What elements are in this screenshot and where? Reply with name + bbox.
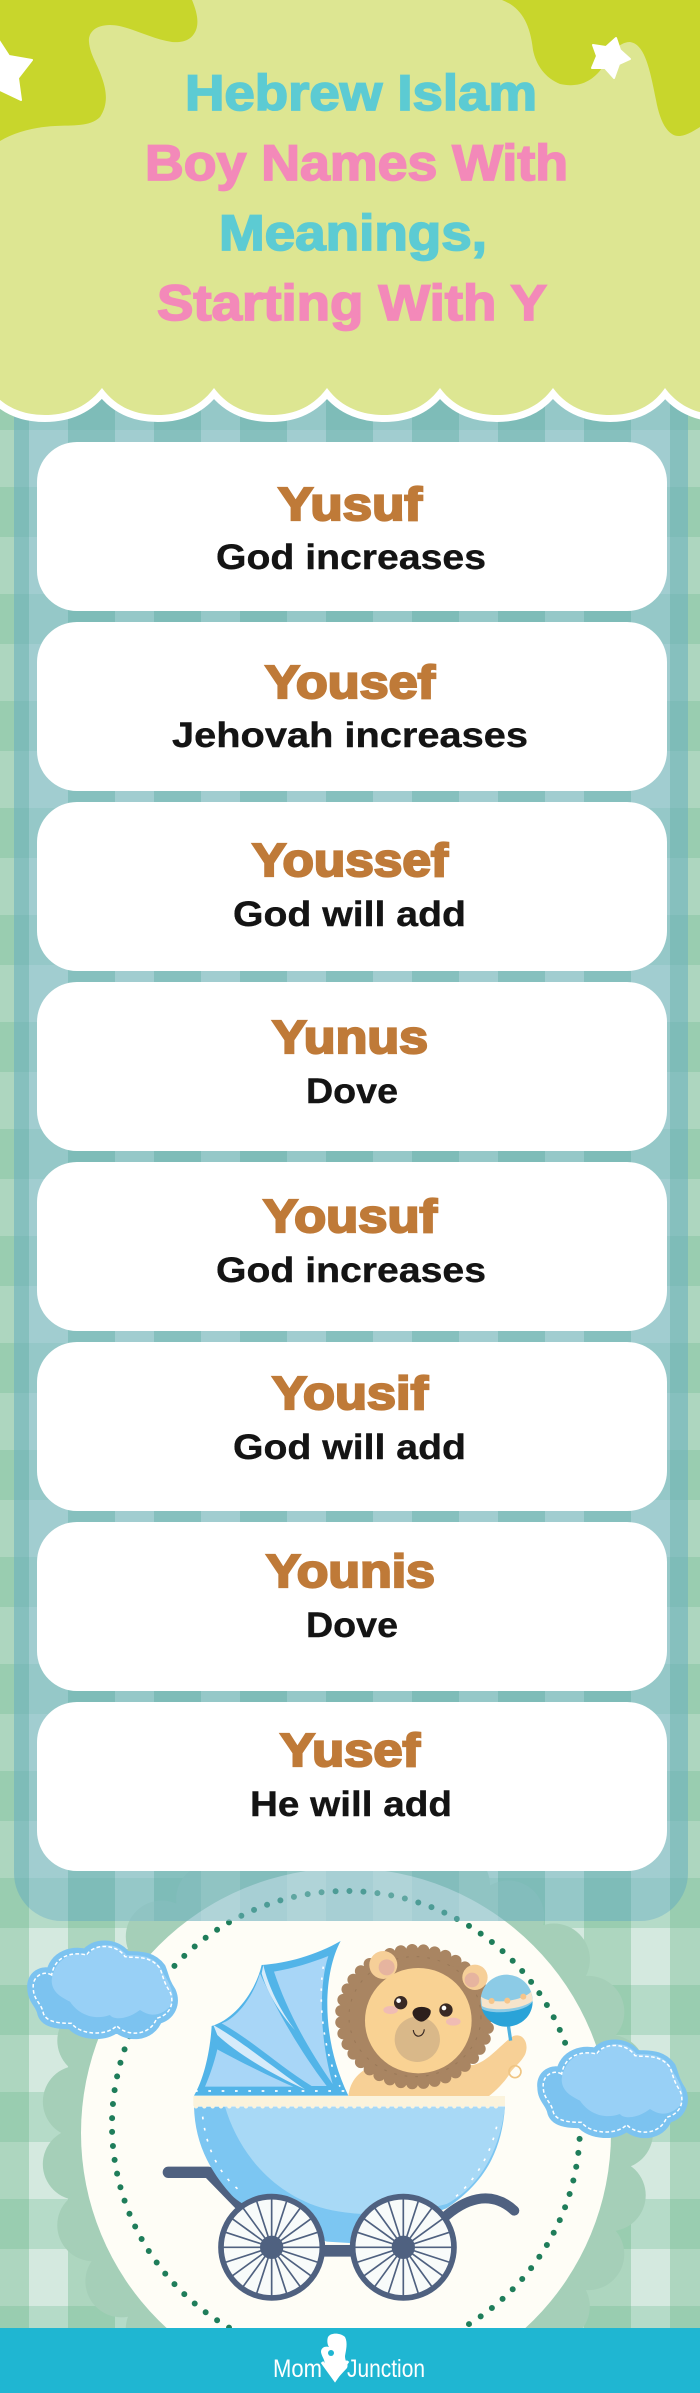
card: Yousuf: Yousuf [263,1190,438,1242]
title: Meanings, [219,205,487,261]
illustration: lion in baby stroller [168,1941,533,2298]
card: Yousuf: God increases [216,1251,486,1290]
lion muzzle [395,2017,440,2062]
card: Yousef: Yousef [265,656,436,708]
scalloped green badge behind circle [77,1863,617,2393]
title: Starting With Y [157,275,547,331]
card: Yousif: God will add [233,1428,466,1467]
lion eyes [394,1996,453,2017]
icon: cloud right [543,2044,683,2132]
stroller wheel left [221,2197,322,2298]
lime corner blob left [0,0,197,141]
title: Boy Names With [145,135,568,191]
card: Youssef: Youssef [252,834,449,886]
lime corner blob right [502,0,700,136]
lion body and arm [348,2035,527,2097]
card: Yunus: Dove [306,1072,398,1111]
panel: name cards [37,442,667,1871]
rattle [481,1975,533,2041]
stroller rear bar [443,2198,514,2218]
card: Yusuf: God increases [216,538,486,577]
header scalloped background [0,0,700,415]
lion mane [341,1950,489,2083]
card: Younis: Dove [306,1606,398,1645]
footer bar [0,2328,700,2393]
card: Yousuf [37,1162,667,1331]
card: Yusuf [37,442,667,611]
card: Yunus [37,982,667,1151]
lion face [365,1968,472,2073]
card: Youssef [37,802,667,971]
dotted green ring [112,1891,580,2359]
icon: white star left [0,36,32,100]
card: Yousef: Jehovah increases [172,716,528,755]
stroller basket [194,2107,505,2243]
panel: translucent teal list backing [14,360,688,1921]
card: Younis: Younis [266,1545,435,1597]
card: Yousif: Yousif [272,1367,429,1419]
stroller wheel right [353,2197,454,2298]
card: Youssef: God will add [233,895,466,934]
card: Yousef [37,622,667,791]
stroller lace trim [193,2096,505,2106]
panel: header [0,0,700,415]
logo wordmark: Junction [347,2355,425,2383]
card: Yusef: He will add [250,1785,452,1824]
stroller canopy [194,1941,348,2096]
logo wordmark [273,2355,425,2383]
card: Younis [37,1522,667,1691]
rattle handle ring [509,2066,521,2078]
card: Yusef: Yusef [280,1724,421,1776]
logo mother and child icon [321,2334,348,2381]
icon: white star right [592,38,630,78]
lion nose and smile [413,2007,431,2036]
icon: cloud left [33,1945,173,2033]
card: Yusuf: Yusuf [278,478,423,530]
lion [341,1950,533,2097]
stroller axle [320,2245,357,2257]
MomJunction logo [273,2334,425,2383]
card: Yunus: Yunus [272,1011,428,1063]
logo wordmark: Mom [273,2355,322,2383]
title: Hebrew Islam [185,65,537,121]
lion ears [369,1951,488,1990]
white circle badge [81,1868,611,2393]
title [145,65,568,331]
lion cheeks [383,2006,461,2026]
card: Yousif [37,1342,667,1511]
card: Yusef [37,1702,667,1871]
stroller handle [168,2172,243,2208]
